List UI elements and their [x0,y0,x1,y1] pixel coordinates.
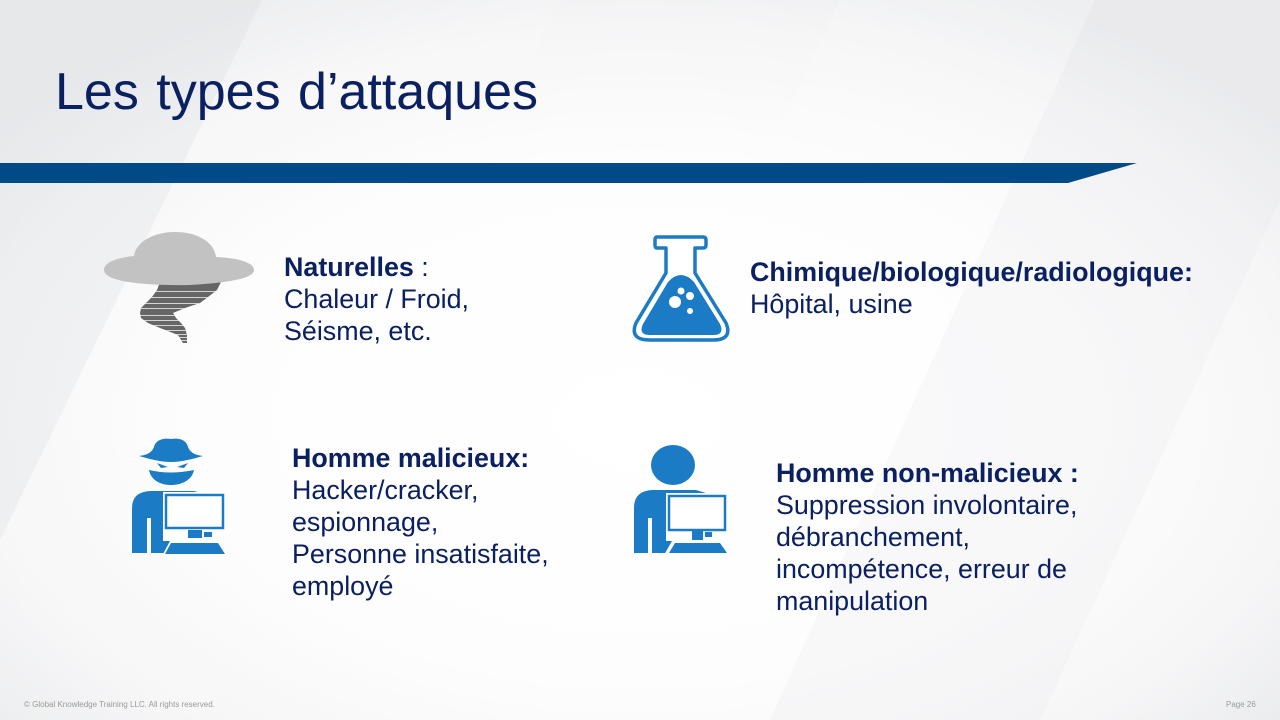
text: Naturelles: Chaleur / Froid, [284,284,469,314]
text: Homme malicieux: espionnage, [292,507,438,537]
icon: malicious hacker [132,438,225,554]
text: Homme non-malicieux: Suppression involontaire, [776,490,1077,520]
text: Homme malicieux: employé [292,571,393,601]
icon: tornado cloud [104,232,254,343]
text: Homme non-malicieux: débranchement, [776,522,970,552]
text: Chimique [750,257,1193,319]
header bar [0,163,1137,183]
footer: copyright: © Global Knowledge Training LLC. All rights reserved. [24,700,215,709]
icon: flask [632,235,730,342]
text: Homme non-malicieux: Homme non-malicieux : [776,458,1079,488]
text: Naturelles: Séisme, etc. [284,316,432,346]
text: Homme non-malicieux [776,458,1079,616]
text: Chimique: Hôpital, usine [750,289,913,319]
footer: page number: Page 26 [1226,700,1256,709]
text: Homme malicieux: Hacker/cracker, [292,475,478,505]
text: Homme malicieux [292,443,549,601]
text: Homme malicieux: Homme malicieux: [292,443,529,473]
text: Naturelles: Naturelles : [284,252,429,282]
text: Chimique: Chimique/biologique/radiologique: [750,257,1193,287]
icon: non-malicious user [634,445,727,553]
text: Naturelles [284,252,469,346]
text: Homme malicieux: Personne insatisfaite, [292,539,549,569]
title: Les types d’attaques [55,63,538,121]
text: Homme non-malicieux: incompétence, erreur de [776,554,1067,584]
text: Homme non-malicieux: manipulation [776,586,928,616]
